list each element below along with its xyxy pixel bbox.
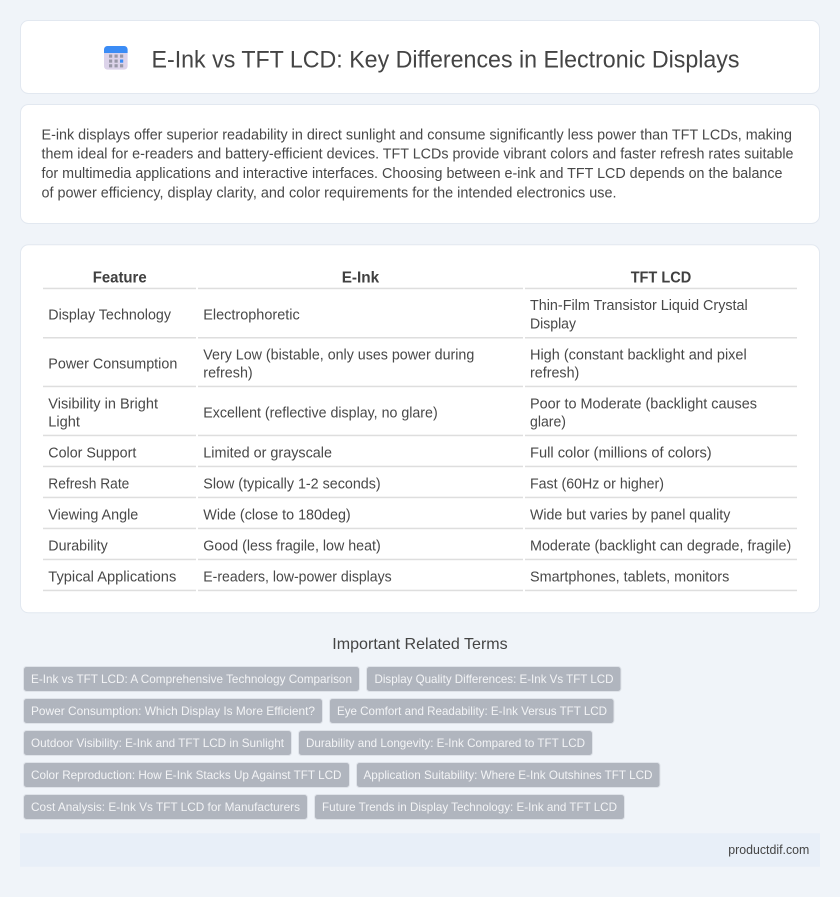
panel: comparison table <box>20 245 820 613</box>
tag: outdoor visibility <box>24 730 292 756</box>
table row: visibility in bright light: Poor to Moderate (backlight causes <box>530 396 757 412</box>
table row: visibility in bright light: Light <box>48 414 80 430</box>
tag: technology comparison: E-Ink vs TFT LCD: A Comprehensive Technology Comparison <box>31 672 352 686</box>
table row: color support: Color Support <box>48 445 136 461</box>
tag: durability and longevity <box>298 730 592 756</box>
table row: durability: Durability <box>48 538 108 554</box>
panel: important related terms <box>24 636 660 820</box>
tag: technology comparison <box>24 666 360 692</box>
tag: future trends: Future Trends in Display Technology: E-Ink and TFT LCD <box>322 800 617 814</box>
tag: future trends <box>314 794 624 820</box>
table row: viewing angle <box>43 507 797 529</box>
table row: visibility in bright light: glare) <box>530 414 566 430</box>
text block: introduction paragraph: E-ink displays offer superior readability in direct sunlight and consume significantly less power than TFT LCDs, making <box>42 126 792 143</box>
table row: viewing angle: Wide (close to 180deg) <box>203 507 351 523</box>
text block: introduction paragraph: of power efficiency, display clarity, and color requirements for the intended electronics use. <box>42 184 616 201</box>
table row: refresh rate: Refresh Rate <box>48 476 129 492</box>
table row: refresh rate: Fast (60Hz or higher) <box>530 476 664 492</box>
tag: eye comfort: Eye Comfort and Readability: E-Ink Versus TFT LCD <box>337 704 607 718</box>
tag: display quality: Display Quality Differences: E-Ink Vs TFT LCD <box>374 672 614 686</box>
table row: typical applications <box>43 569 797 591</box>
tag: cost analysis: Cost Analysis: E-Ink Vs TFT LCD for Manufacturers <box>31 800 300 814</box>
table row: durability: Moderate (backlight can degrade, fragile) <box>530 538 791 554</box>
table header row: TFT LCD <box>631 270 691 287</box>
table row: color support: Full color (millions of colors) <box>530 445 712 461</box>
title: E-Ink vs TFT LCD: Key Differences in Electronic Displays <box>152 46 740 73</box>
tag: power consumption: Power Consumption: Which Display Is More Efficient? <box>31 704 315 718</box>
tag: color reproduction: Color Reproduction: How E-Ink Stacks Up Against TFT LCD <box>31 768 342 782</box>
footer site name: productdif.com <box>728 842 809 857</box>
tag: outdoor visibility: Outdoor Visibility: E-Ink and TFT LCD in Sunlight <box>31 736 285 750</box>
table row: viewing angle: Wide but varies by panel quality <box>530 507 731 523</box>
table row: power consumption: Very Low (bistable, only uses power during <box>203 347 474 363</box>
table row: durability <box>43 538 797 560</box>
table row: power consumption: refresh) <box>203 365 253 381</box>
table row: refresh rate <box>43 476 797 498</box>
text block: introduction paragraph: them ideal for e-readers and battery-efficient devices. TFT LCDs provide vibrant colors and faster refresh rates suitable <box>42 145 794 162</box>
text block: introduction paragraph <box>42 126 794 201</box>
tag: application suitability <box>356 762 660 788</box>
table row: display technology <box>43 298 797 338</box>
table row: viewing angle: Viewing Angle <box>48 507 138 523</box>
table row: visibility in bright light <box>43 396 797 436</box>
table row: display technology: Electrophoretic <box>203 307 300 323</box>
tag: color reproduction <box>24 762 350 788</box>
table row: power consumption: Power Consumption <box>48 356 177 372</box>
table row: durability: Good (less fragile, low heat) <box>203 538 381 554</box>
table row: visibility in bright light: Visibility in Bright <box>48 396 158 412</box>
table row: visibility in bright light: Excellent (reflective display, no glare) <box>203 405 438 421</box>
icon: calendar-style display grid <box>104 46 128 70</box>
table row: typical applications: Typical Applications <box>48 569 176 585</box>
table row: typical applications: E-readers, low-power displays <box>203 569 392 585</box>
panel: header <box>20 20 820 94</box>
tag: application suitability: Application Suitability: Where E-Ink Outshines TFT LCD <box>364 768 653 782</box>
panel: introduction <box>20 104 820 224</box>
table row: display technology: Display <box>530 316 577 332</box>
table row: refresh rate: Slow (typically 1-2 seconds) <box>203 476 381 492</box>
heading: important related terms: Important Related Terms <box>332 636 508 653</box>
table row: color support <box>43 445 797 467</box>
table row: power consumption: High (constant backlight and pixel <box>530 347 747 363</box>
table header row: E-Ink <box>342 270 379 287</box>
tag: durability and longevity: Durability and Longevity: E-Ink Compared to TFT LCD <box>306 736 585 750</box>
tag: eye comfort <box>330 698 614 724</box>
table header row <box>43 270 797 289</box>
table row: power consumption: refresh) <box>530 365 579 381</box>
tag: cost analysis <box>24 794 308 820</box>
table row: typical applications: Smartphones, tablets, monitors <box>530 569 729 585</box>
table header row: Feature <box>93 270 147 287</box>
tag: display quality <box>366 666 621 692</box>
tag: power consumption <box>24 698 322 724</box>
text block: introduction paragraph: for multimedia applications and interactive interfaces. Choosing between e-ink and TFT LCD depends on the balance <box>42 165 782 182</box>
table row: display technology: Display Technology <box>48 307 172 323</box>
table row: power consumption <box>43 347 797 387</box>
table row: display technology: Thin-Film Transistor Liquid Crystal <box>530 298 748 314</box>
table row: color support: Limited or grayscale <box>203 445 332 461</box>
panel: footer <box>20 833 820 867</box>
